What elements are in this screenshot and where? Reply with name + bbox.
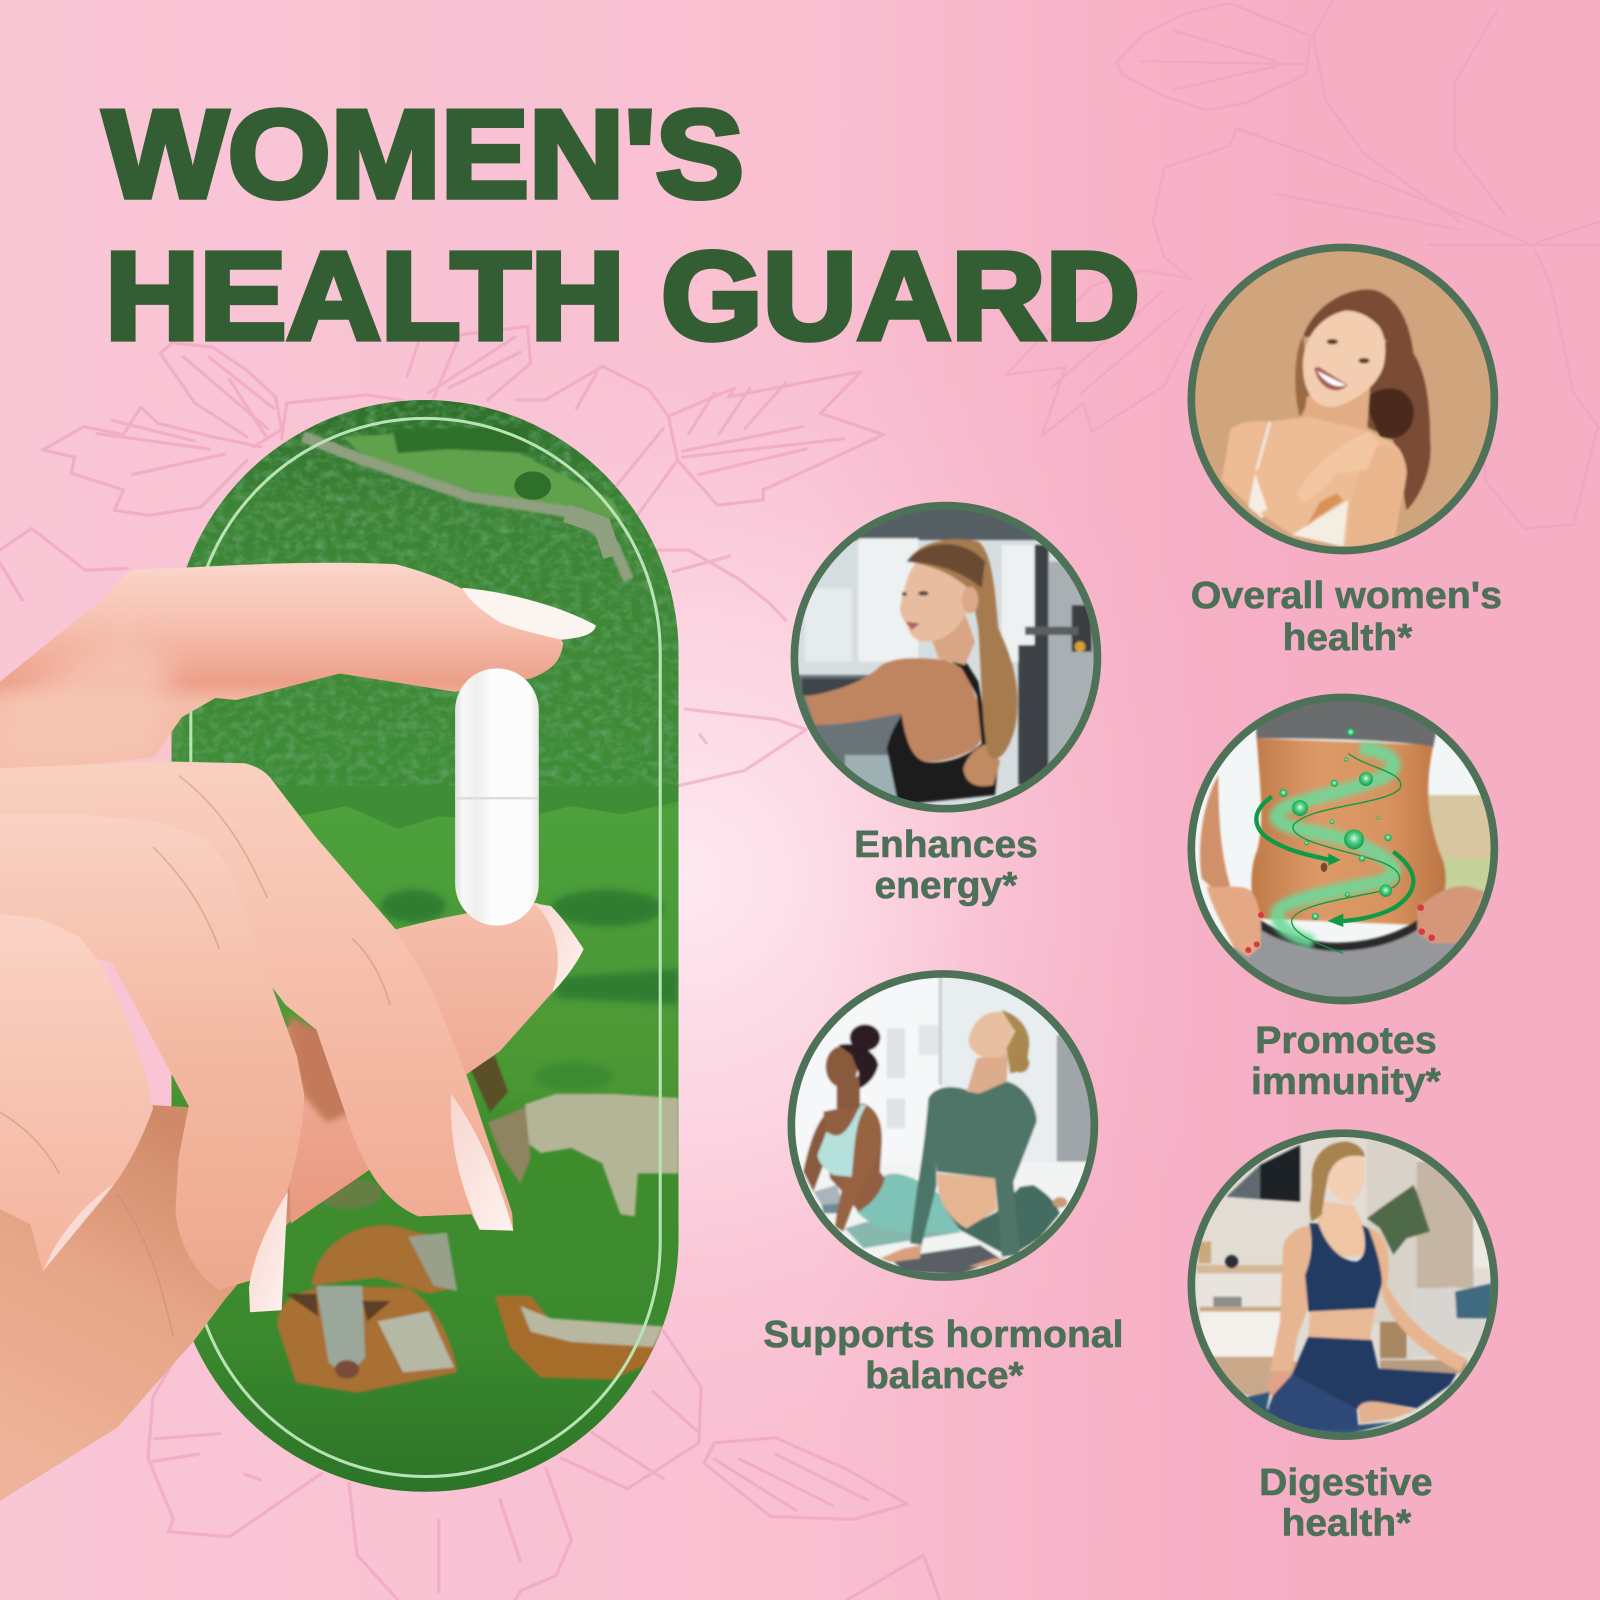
ring	[1191, 1133, 1494, 1436]
title	[103, 85, 1140, 366]
label: Digestive	[1259, 1461, 1433, 1503]
title line 2: HEALTH GUARD	[105, 227, 1140, 366]
forest texture	[171, 400, 679, 808]
hillside clearing and path	[303, 427, 629, 580]
panel: meadow pill with cows	[171, 400, 679, 1492]
benefit: enhances energy	[785, 505, 1115, 906]
benefit: digestive health	[1191, 1133, 1499, 1544]
label: Promotes	[1255, 1019, 1437, 1061]
cow herd	[277, 1056, 679, 1393]
index base highlight	[0, 633, 173, 770]
label	[1259, 1461, 1433, 1544]
label: Overall women's	[1191, 574, 1502, 616]
ring	[791, 974, 1094, 1277]
photo: smiling woman	[1189, 245, 1497, 553]
label: Enhances	[854, 823, 1038, 865]
pinky nail	[43, 1184, 114, 1271]
thumb	[288, 903, 571, 1223]
floral line art left and bottom	[0, 327, 940, 1600]
standing cow	[520, 1094, 679, 1216]
title line 1: WOMEN'S	[103, 85, 744, 224]
palm	[0, 1020, 367, 1501]
ring	[1191, 247, 1494, 551]
photo: woman at gym	[798, 510, 1094, 805]
label: immunity*	[1251, 1060, 1441, 1102]
lying cow rear	[311, 1225, 456, 1294]
knuckle creases	[0, 776, 390, 1337]
index finger	[0, 563, 563, 776]
label: health*	[1283, 616, 1413, 658]
label	[1251, 1019, 1441, 1102]
label	[854, 823, 1038, 906]
ring	[1191, 697, 1494, 1001]
label	[763, 1313, 1123, 1396]
ring nail	[249, 1192, 288, 1312]
middle nail	[451, 1094, 513, 1231]
pinky finger	[0, 914, 153, 1271]
benefit: supports hormonal balance	[763, 974, 1123, 1396]
hand holding capsule	[0, 563, 596, 1501]
photo: two women in yoga pose	[791, 974, 1097, 1285]
lying cow front	[277, 1286, 457, 1393]
middle finger	[0, 761, 513, 1231]
label: energy*	[874, 864, 1018, 906]
label: Supports hormonal	[763, 1313, 1123, 1355]
forest edge	[278, 786, 678, 828]
floral line art top right	[1006, 0, 1600, 529]
far cow	[316, 1179, 382, 1209]
index nail	[462, 588, 596, 640]
meadow background	[171, 400, 679, 1492]
capsule	[455, 668, 539, 926]
label: health*	[1282, 1502, 1412, 1544]
thumb nail	[533, 903, 584, 993]
benefit: promotes immunity	[1191, 685, 1497, 1102]
photo: abdomen with green swirl	[1195, 701, 1490, 997]
field bushes	[381, 890, 679, 1091]
lying cow right	[495, 1296, 663, 1380]
ring finger	[0, 814, 304, 1290]
photo: woman meditating	[1191, 1133, 1499, 1439]
thin pill outline	[191, 418, 660, 1477]
label: balance*	[865, 1354, 1024, 1396]
label	[1191, 574, 1502, 658]
benefit: overall women's health	[1189, 245, 1502, 658]
finger shadow	[288, 1015, 352, 1122]
ring	[794, 506, 1097, 809]
